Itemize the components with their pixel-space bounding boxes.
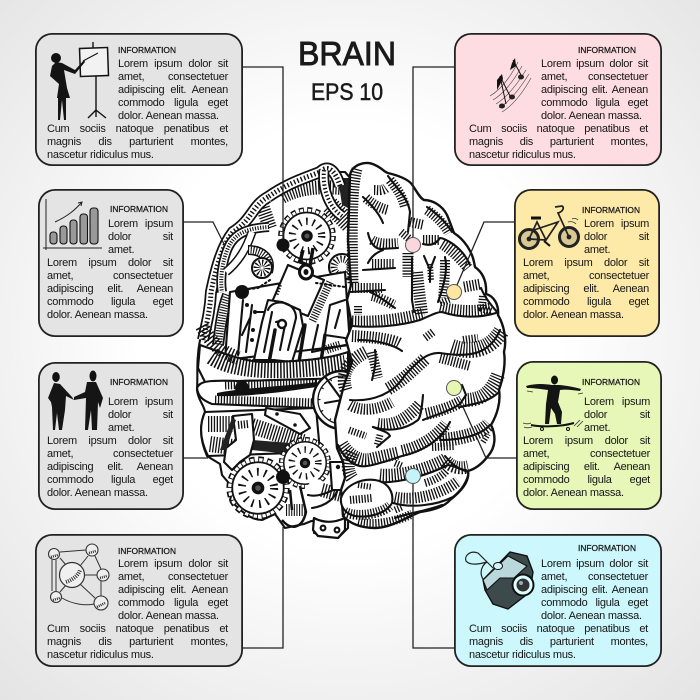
text block: adipiscing elit. Aenean [47,460,173,472]
text block: adipiscing elit. Aenean [541,84,648,96]
text block: dolor. Aenean massa. [541,110,642,122]
text block: dolor. Aenean massa. [47,486,148,498]
text block: amet, consectetuer [47,448,173,460]
text block: amet, consectetuer [541,570,648,582]
text block: INFORMATION [118,546,176,556]
icon: two men shaking hands [48,370,103,430]
icon: camera [465,551,534,610]
text block: dolor sit [108,230,173,242]
text block: Lorem ipsum dolor sit [118,558,228,570]
text block: Lorem ipsum dolor sit [541,58,648,70]
text block: dolor. Aenean massa. [541,610,642,622]
text block: dolor. Aenean massa. [118,610,219,622]
text block [47,546,228,660]
icon: connected circles [48,544,110,610]
upper folds [350,176,497,315]
text block: INFORMATION [110,376,168,386]
text block: adipiscing elit. Aenean [47,282,173,294]
text block: dolor. Aenean massa. [523,308,624,320]
text block: Cum sociis natoque penatibus et [47,622,228,634]
text block: commodo ligula eget [47,296,173,308]
text block: dolor sit [108,408,173,420]
text block: amet, consectetuer [523,270,649,282]
right hemisphere: organic brain [335,163,505,528]
text block: commodo ligula eget [541,596,648,608]
panel: presentation [35,33,243,166]
panel: network [35,534,243,667]
text block: dolor sit [584,408,650,420]
hatched backing behind upper gear [282,187,342,197]
text block: amet, consectetuer [47,270,173,282]
text block: amet. [584,244,610,256]
circuit board [225,248,350,368]
text block: Lorem ipsum dolor sit [118,58,228,70]
text block: commodo ligula eget [541,96,648,108]
panel: bicycle [514,189,660,337]
text block: amet. [584,422,610,434]
text block: nascetur ridiculus mus. [47,148,154,160]
text block: commodo ligula eget [523,296,649,308]
subtitle: EPS 10 [311,79,383,106]
text block: adipiscing elit. Aenean [118,584,228,596]
text block: nascetur ridiculus mus. [47,648,154,660]
text block: INFORMATION [582,376,640,386]
panel: skateboard [516,361,662,510]
text block: magnis dis parturient montes, [47,636,228,648]
text block: commodo ligula eget [118,596,228,608]
text block: Lorem ipsum dolor sit [523,256,649,268]
text block: amet, consectetuer [523,448,650,460]
text block: nascetur ridiculus mus. [469,148,576,160]
text block: Lorem ipsum dolor sit [47,256,173,268]
text block: Cum sociis natoque penatibus et [47,122,228,134]
connector dots [235,238,462,484]
pipe and collar [282,462,350,538]
text block: adipiscing elit. Aenean [118,84,228,96]
text block: amet, consectetuer [118,70,228,82]
text block [47,44,228,160]
connector lines [184,67,516,648]
text block: Lorem ipsum [108,218,173,230]
clock [313,371,371,429]
text block: adipiscing elit. Aenean [541,584,648,596]
text block: Lorem ipsum dolor sit [541,558,648,570]
panel: growth chart [38,189,184,337]
ribbed tubes [197,326,348,470]
text block: amet. [108,422,134,434]
text block: Lorem ipsum dolor sit [47,434,173,446]
text block [469,542,648,660]
text block: nascetur ridiculus mus. [469,648,576,660]
text block [523,204,650,320]
text block: INFORMATION [582,204,640,214]
text block: INFORMATION [578,542,636,552]
text block [523,376,650,498]
icon: skateboarder [522,376,584,431]
text block: adipiscing elit. Aenean [523,460,650,472]
text block: INFORMATION [118,44,176,54]
text block: dolor sit [584,230,649,242]
text block: magnis dis parturient montes, [469,136,648,148]
text block: commodo ligula eget [118,96,228,108]
icon: bicycle [518,205,580,250]
panel: handshake [38,362,184,510]
text block: Lorem ipsum dolor sit [523,434,650,446]
text block: amet, consectetuer [118,570,228,582]
small wheel [329,254,355,280]
icon: bar chart [43,199,102,250]
text block: Lorem ipsum [584,218,649,230]
text block [47,204,174,320]
text block: amet, consectetuer [541,70,648,82]
midline hatching [352,169,357,284]
icon: presenter at board [50,42,110,120]
upper gear [282,211,332,261]
text block [47,376,174,498]
text block: Lorem ipsum [584,396,650,408]
left hemisphere: machine [197,168,371,538]
text block: dolor. Aenean massa. [47,308,148,320]
text block: amet. [108,244,134,256]
panel: music [454,33,662,166]
silhouette [197,172,352,538]
text block: dolor. Aenean massa. [118,110,219,122]
text block: magnis dis parturient montes, [47,136,228,148]
icon: music notes [490,58,532,112]
text block: Cum sociis natoque penatibus et [469,122,648,134]
text block: commodo ligula eget [47,474,173,486]
title: BRAIN [298,35,396,72]
text block: Cum sociis natoque penatibus et [469,622,648,634]
text block [469,44,648,160]
text block: adipiscing elit. Aenean [523,282,649,294]
panel: camera [454,534,662,667]
text block: Lorem ipsum [108,396,173,408]
middle folds [338,307,502,470]
ropes [203,168,342,345]
lower gears [282,440,328,486]
text block: commodo ligula eget [523,474,650,486]
text block: INFORMATION [578,44,636,54]
text block: dolor. Aenean massa. [523,486,624,498]
text block: magnis dis parturient montes, [469,636,648,648]
outline [335,163,505,528]
lower folds [341,452,468,524]
text block: INFORMATION [110,204,168,214]
